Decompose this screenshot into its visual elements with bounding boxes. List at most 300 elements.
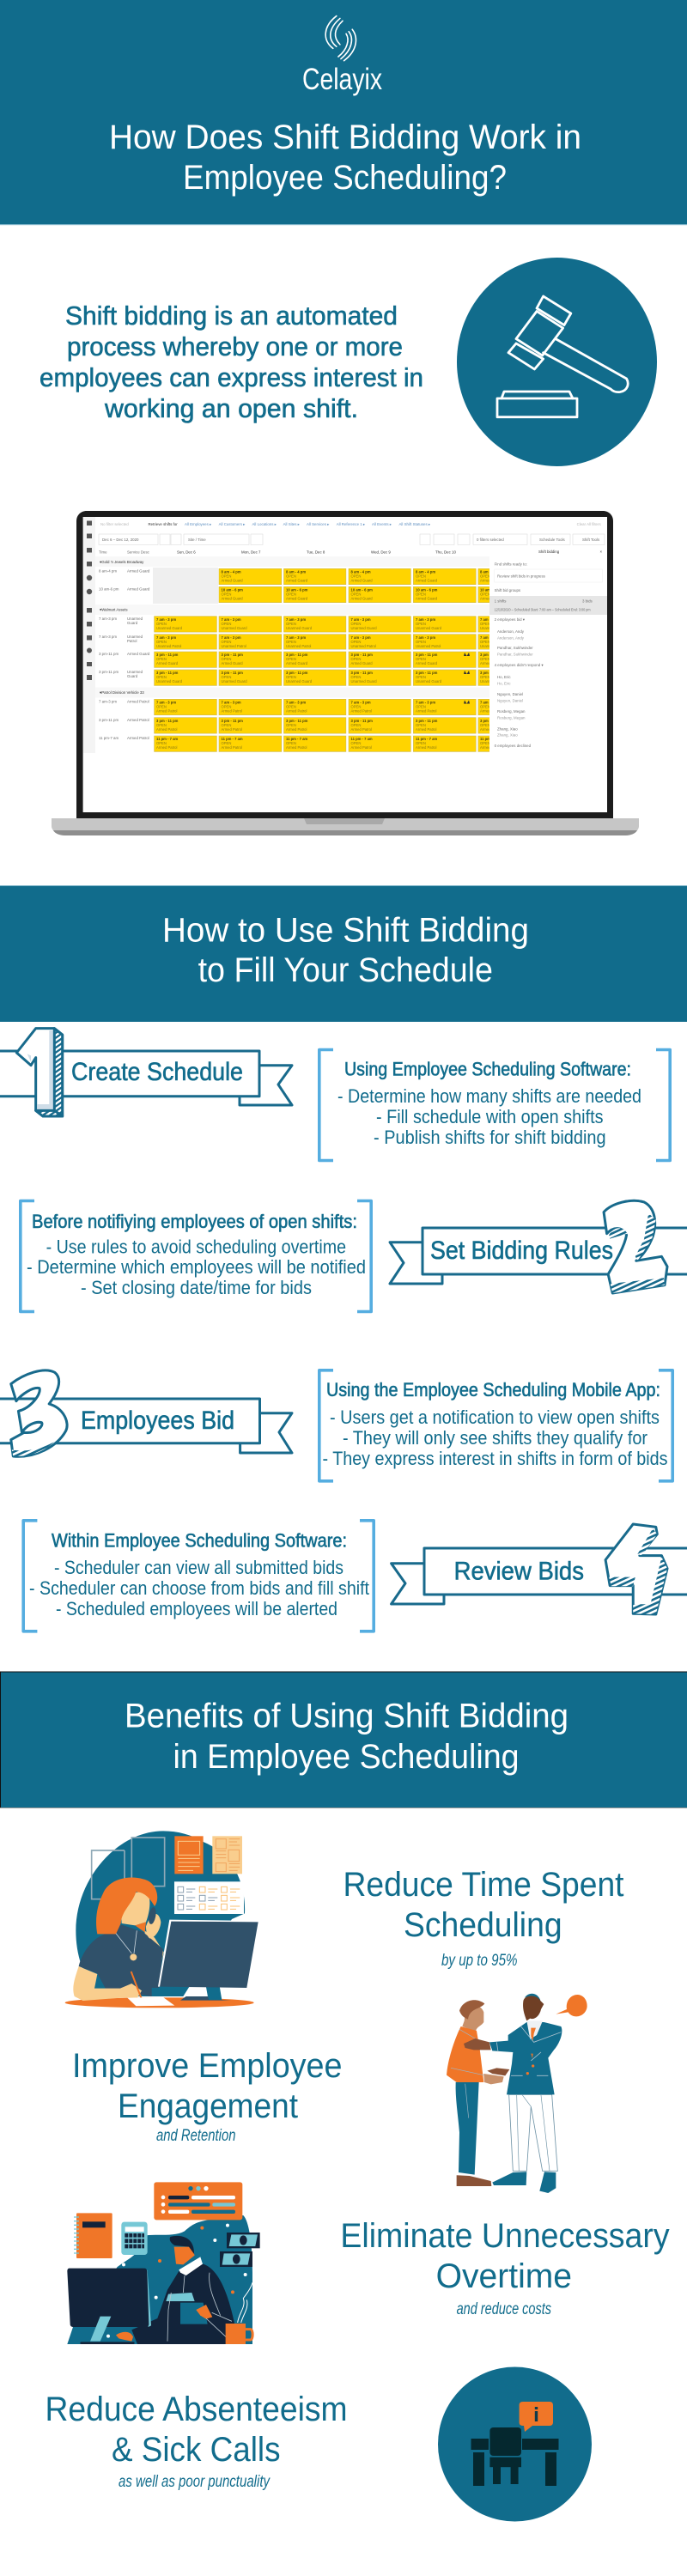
filter bar: No filter selected bbox=[100, 522, 129, 526]
schedule grid: open shifts: Armed bbox=[480, 727, 491, 732]
row labels: Armed Patrol bbox=[127, 736, 149, 740]
shift bidding side panel: Shift bidding bbox=[538, 550, 560, 554]
shift bidding side panel: Find shifts ready to: bbox=[495, 562, 527, 567]
benefits section header: Benefits of Using Shift Bidding bbox=[125, 1698, 568, 1735]
schedule grid: open shifts: OPEN bbox=[222, 704, 231, 709]
step 3: employees bid bbox=[0, 1370, 292, 1456]
schedule grid: open shifts: OPEN bbox=[286, 657, 296, 661]
schedule grid: open shifts: OPEN bbox=[480, 574, 490, 579]
heading: reduce absenteeism: Reduce Absenteeism bbox=[45, 2391, 347, 2428]
schedule grid: open shifts: 7 am - 3 pm bbox=[156, 701, 176, 704]
icon: sound waves bbox=[325, 16, 356, 61]
heading: improve employee engagement: Engagement bbox=[118, 2087, 298, 2125]
shift bidding side panel: Nguyen, Daniel bbox=[497, 692, 523, 696]
heading: improve employee engagement: and Retention bbox=[156, 2127, 235, 2145]
schedule grid: open shifts: Unarmed Guard bbox=[222, 679, 247, 683]
schedule grid: open shifts: 11 pm - 7 am bbox=[156, 737, 178, 741]
schedule grid: open shifts: OPEN bbox=[350, 741, 361, 745]
schedule grid: open shifts: OPEN bbox=[416, 574, 426, 579]
schedule grid: open shifts: Armed Patrol bbox=[286, 709, 307, 713]
schedule grid: open shifts: 8 am - 4 pm bbox=[350, 570, 371, 574]
schedule grid: open shifts: OPEN bbox=[350, 640, 361, 644]
schedule grid: open shifts: 3 pm bbox=[480, 671, 489, 675]
row labels: Patrol bbox=[127, 639, 137, 643]
schedule grid: open shifts: OPEN bbox=[156, 741, 167, 745]
schedule grid: open shifts: Armed Patrol bbox=[222, 727, 242, 732]
ribbon bbox=[0, 1051, 292, 1105]
callout: before notifying employees bbox=[21, 1200, 371, 1312]
intro text block: working an open shift. bbox=[104, 393, 358, 423]
row labels: Armed Patrol bbox=[127, 699, 149, 704]
schedule grid: open shifts: OPEN bbox=[222, 741, 231, 745]
schedule grid: open shifts: 3 pm - 11 pm bbox=[222, 653, 243, 657]
table head: Time bbox=[99, 550, 107, 555]
schedule grid: open shifts: 7 am - 3 pm bbox=[222, 635, 241, 640]
schedule grid: open shifts: Unarmed Patrol bbox=[156, 644, 181, 648]
dots bbox=[106, 2224, 247, 2338]
schedule grid: open shifts: Unarmed Guard bbox=[156, 626, 183, 630]
callout: using employee scheduling software: - Publish shifts for shift bidding bbox=[374, 1127, 606, 1148]
schedule grid: open shifts bbox=[155, 568, 495, 751]
filter bar: All Events ▸ bbox=[372, 522, 392, 526]
shift bidding side panel: 4 employees didn't respond ▾ bbox=[495, 663, 544, 667]
desk and chair bbox=[471, 2427, 558, 2486]
schedule grid: open shifts: OPEN bbox=[416, 723, 426, 727]
schedule grid: open shifts: Armed Patrol bbox=[416, 709, 437, 713]
schedule grid: open shifts: Unarmed Guard bbox=[286, 679, 313, 683]
schedule grid: open shifts: Unarmed Patrol bbox=[222, 644, 246, 648]
speech bubble bbox=[556, 1995, 587, 2016]
schedule grid: open shifts: OPEN bbox=[286, 723, 296, 727]
toolbar: Site / Time bbox=[188, 538, 206, 542]
wall frames bbox=[92, 1838, 165, 1899]
callout: using employee scheduling software: Using Employee Scheduling Software: bbox=[344, 1059, 631, 1080]
schedule grid: open shifts: OPEN bbox=[416, 675, 426, 679]
schedule grid: open shifts: Armed Patrol bbox=[350, 709, 372, 713]
monitor bbox=[158, 1920, 258, 2001]
schedule grid: open shifts: Armed bbox=[480, 579, 491, 582]
schedule grid: open shifts: 7 am - 3 pm bbox=[222, 617, 241, 622]
shift bidding side panel: Nguyen, Daniel bbox=[497, 699, 523, 702]
shift bidding side panel: Zhang, Xiao bbox=[497, 733, 518, 737]
schedule grid: open shifts: 3 pm - 11 pm bbox=[222, 671, 243, 675]
schedule grid: open shifts: 11 pm - 7 am bbox=[416, 737, 437, 741]
schedule grid: open shifts: 3 pm - 11 pm bbox=[350, 719, 373, 723]
callout: before notifying employees: - Determine which employees will be notified bbox=[27, 1256, 366, 1278]
heading: reduce absenteeism: & Sick Calls bbox=[112, 2431, 280, 2469]
laptop base bbox=[52, 818, 639, 835]
logo: Celayix: Celayix bbox=[302, 63, 382, 96]
how-to section header: to Fill Your Schedule bbox=[198, 951, 493, 989]
schedule grid: open shifts: 8 am - 4 pm bbox=[222, 570, 241, 574]
shift bidding side panel: 0 employees declined bbox=[495, 744, 532, 748]
intro text block bbox=[40, 301, 423, 423]
callout: within employee scheduling software: - Scheduler can view all submitted bids bbox=[54, 1557, 344, 1578]
schedule grid: open shifts: 8 am - 4 pm bbox=[286, 570, 306, 574]
illustration: two men shaking hands bbox=[447, 1994, 587, 2193]
schedule grid: open shifts: 7 am - 3 pm bbox=[286, 635, 306, 640]
schedule grid: open shifts: 8 am - 4 pm bbox=[416, 570, 435, 574]
schedule grid: open shifts: 7 am - 3 pm bbox=[350, 617, 371, 622]
callout: using employee scheduling software: - Determine how many shifts are needed bbox=[337, 1085, 641, 1107]
table head bbox=[99, 550, 456, 555]
report bubble bbox=[154, 2182, 242, 2220]
sidebar bbox=[83, 517, 95, 753]
number 3 bbox=[11, 1370, 67, 1456]
shift bidding side panel: Anderson, Andy bbox=[497, 635, 525, 641]
callout: using the mobile app: - They will only see shifts they qualify for bbox=[343, 1427, 647, 1449]
row labels: 8 am-4 pm bbox=[99, 568, 117, 574]
schedule grid: open shifts: Armed bbox=[480, 596, 491, 601]
schedule grid: open shifts: 3 pm - 11 pm bbox=[286, 653, 308, 657]
shift bidding side panel: Pandhar, Sukhwinder bbox=[497, 646, 533, 650]
heading: eliminate unnecessary overtime bbox=[340, 2217, 670, 2318]
schedule grid: open shifts: 3 pm - 11 pm bbox=[416, 719, 438, 723]
schedule grid: open shifts: OPEN bbox=[416, 741, 426, 745]
filter bar: All Locations ▸ bbox=[252, 522, 277, 526]
heading: reduce time spent scheduling: Reduce Time Spent bbox=[344, 1866, 623, 1904]
man in orange shirt bbox=[447, 2000, 491, 2186]
schedule grid: open shifts: 3 pm - 11 pm bbox=[156, 671, 179, 675]
money bbox=[220, 2233, 260, 2267]
schedule grid: open shifts: 7 am - 3 pm bbox=[350, 701, 371, 704]
schedule grid: open shifts: 3 pm bbox=[480, 653, 489, 657]
man in blue suit bbox=[489, 1994, 562, 2193]
toolbar: 0 filters selected bbox=[477, 538, 504, 542]
man bbox=[116, 2236, 234, 2344]
schedule grid: open shifts: OPEN bbox=[286, 640, 296, 644]
schedule grid: open shifts: OPEN bbox=[350, 622, 361, 626]
callout: before notifying employees: Before notifiying employees of open shifts: bbox=[32, 1211, 357, 1232]
calculator bbox=[121, 2222, 148, 2255]
schedule grid: open shifts: Armed Guard bbox=[416, 596, 438, 601]
schedule grid: open shifts: Armed Patrol bbox=[286, 727, 307, 732]
schedule grid: open shifts: Armed Guard bbox=[156, 661, 179, 665]
schedule grid: open shifts: Armed Guard bbox=[350, 596, 373, 601]
schedule grid: open shifts: Unarmed Patrol bbox=[350, 644, 376, 648]
ribbon bbox=[0, 1399, 292, 1453]
row labels bbox=[99, 568, 150, 740]
row labels: 7 am-3 pm bbox=[99, 699, 117, 704]
row labels: 3 pm-11 pm bbox=[99, 670, 119, 674]
schedule grid: open shifts: 7 am - 3 pm bbox=[350, 635, 371, 640]
logo: Celayix bbox=[302, 16, 382, 96]
shift bidding side panel: Ho, Eric bbox=[497, 682, 511, 685]
schedule grid: open shifts: Armed bbox=[480, 745, 491, 750]
site group rows bbox=[95, 556, 490, 697]
table head: Thu, Dec 10 bbox=[435, 550, 456, 555]
table head: Tue, Dec 8 bbox=[307, 550, 325, 555]
schedule grid: open shifts: Armed Guard bbox=[350, 661, 373, 665]
site group rows: ▾Gold 'n Jewels Broadway bbox=[100, 560, 144, 564]
coffee mug bbox=[226, 2282, 252, 2344]
schedule grid: open shifts: OPEN bbox=[480, 592, 490, 596]
schedule grid: open shifts: OPEN bbox=[350, 675, 361, 679]
how-to section header bbox=[0, 885, 687, 1022]
row labels: Unarmed bbox=[127, 670, 143, 674]
laptop bezel bbox=[76, 511, 613, 818]
heading: improve employee engagement: Improve Employee bbox=[72, 2047, 342, 2085]
schedule grid: open shifts: OPEN bbox=[416, 704, 426, 709]
toolbar: Schedule Tools bbox=[539, 538, 566, 542]
callout: using employee scheduling software: - Fill schedule with open shifts bbox=[376, 1106, 603, 1127]
schedule grid: open shifts: OPEN bbox=[416, 622, 426, 626]
schedule grid: open shifts: Armed Patrol bbox=[156, 745, 178, 750]
schedule grid: open shifts: 3 pm - 11 pm bbox=[416, 671, 438, 675]
row labels: Unarmed bbox=[127, 617, 143, 621]
schedule grid: open shifts: 3 pm - 11 pm bbox=[156, 653, 179, 657]
schedule grid: open shifts: OPEN bbox=[416, 640, 426, 644]
schedule grid: open shifts: Armed Guard bbox=[416, 661, 438, 665]
schedule grid: open shifts: Armed bbox=[480, 661, 491, 665]
schedule grid: open shifts: OPEN bbox=[350, 657, 361, 661]
schedule grid: open shifts: 7 am - 3 pm bbox=[156, 635, 176, 640]
icon: gavel in circle bbox=[457, 258, 657, 466]
schedule grid: open shifts: OPEN bbox=[480, 675, 490, 679]
row labels: Guard bbox=[127, 674, 138, 678]
schedule grid: open shifts: 7 am - 3 pm bbox=[286, 617, 306, 622]
title: How Does Shift Bidding Work in bbox=[109, 118, 581, 156]
row labels: 3 pm-11 pm bbox=[99, 652, 119, 656]
filter bar: All Shift Statuses ▸ bbox=[398, 522, 430, 526]
schedule grid: open shifts: Armed Patrol bbox=[156, 727, 178, 732]
schedule grid: open shifts: OPEN bbox=[416, 657, 426, 661]
toolbar: Dec 6 – Dec 12, 2020 bbox=[102, 538, 139, 542]
row labels: Unarmed bbox=[127, 635, 143, 639]
number 4 bbox=[605, 1524, 667, 1614]
schedule grid: open shifts: OPEN bbox=[156, 675, 167, 679]
row labels: Armed Guard bbox=[127, 568, 150, 574]
callout: before notifying employees: - Set closing date/time for bids bbox=[81, 1277, 312, 1298]
step 1: create schedule bbox=[0, 1029, 292, 1116]
benefits section header: in Employee Scheduling bbox=[173, 1738, 519, 1776]
site group rows: ▾Walmart Assets bbox=[100, 608, 128, 611]
schedule grid: open shifts: 7 am - 3 pm bbox=[156, 617, 176, 622]
schedule grid: open shifts: Unarmed Guard bbox=[416, 679, 442, 683]
schedule grid: open shifts: Armed Guard bbox=[286, 596, 308, 601]
number 2 bbox=[604, 1200, 667, 1293]
illustration: woman on the phone at computer bbox=[65, 1831, 258, 2008]
schedule grid: open shifts: 10 am bbox=[480, 587, 490, 592]
schedule grid: open shifts: OPEN bbox=[222, 640, 231, 644]
shift bidding side panel bbox=[489, 548, 607, 754]
callout: using the mobile app: - Users get a notification to view open shifts bbox=[330, 1406, 660, 1428]
laptop with scheduling software screenshot bbox=[52, 511, 639, 835]
schedule grid: open shifts: 7 am - 3 pm bbox=[416, 701, 435, 704]
schedule grid: open shifts: 7 am - 3 pm bbox=[416, 617, 435, 622]
schedule grid: open shifts: 10 am - 6 pm bbox=[222, 587, 243, 592]
filter bar: All Sites ▸ bbox=[283, 522, 300, 526]
filter bar: All Reference 1 ▸ bbox=[337, 522, 365, 526]
schedule grid: open shifts: OPEN bbox=[480, 640, 490, 644]
checklist bbox=[174, 1881, 244, 1914]
schedule grid: open shifts: OPEN bbox=[350, 704, 361, 709]
filter bar: Clear All filters bbox=[577, 522, 601, 526]
filter bar: All Customers ▸ bbox=[219, 522, 245, 526]
intro text block: process whereby one or more bbox=[67, 331, 403, 361]
schedule grid: open shifts: OPEN bbox=[156, 640, 167, 644]
schedule grid: open shifts: Unarm bbox=[480, 679, 491, 683]
step 4: review bids bbox=[392, 1524, 687, 1614]
heading: reduce absenteeism bbox=[45, 2391, 347, 2491]
desk bbox=[65, 1997, 254, 2008]
shift bidding side panel: 3 bids bbox=[582, 599, 593, 603]
shift bidding side panel: Shift bid groups bbox=[495, 588, 521, 592]
filter bar: Retrieve shifts for bbox=[148, 522, 178, 526]
toolbar: Shift Tools bbox=[582, 538, 600, 542]
ribbon bbox=[390, 1228, 687, 1284]
schedule grid: open shifts: OPEN bbox=[350, 723, 361, 727]
schedule grid: open shifts: Unarmed Guard bbox=[286, 626, 313, 630]
schedule grid: open shifts: OPEN bbox=[480, 723, 490, 727]
how-to section header: How to Use Shift Bidding bbox=[162, 912, 529, 950]
paper bbox=[127, 1997, 174, 2006]
schedule grid: open shifts: Armed Patrol bbox=[222, 709, 242, 713]
schedule grid: open shifts: Unarmed Guard bbox=[350, 626, 377, 630]
schedule grid: open shifts: Unarmed Patrol bbox=[286, 644, 311, 648]
schedule grid: open shifts: OPEN bbox=[480, 622, 490, 626]
callout: before notifying employees: - Use rules to avoid scheduling overtime bbox=[46, 1236, 346, 1257]
schedule grid: open shifts: 3 pm bbox=[480, 719, 489, 723]
callout: using the mobile app bbox=[319, 1370, 672, 1481]
schedule grid: open shifts: 3 pm - 11 pm bbox=[350, 671, 373, 675]
schedule grid: open shifts: 11 pm - 7 am bbox=[350, 737, 373, 741]
schedule grid: open shifts: Armed Guard bbox=[286, 579, 308, 582]
schedule grid: open shifts: 10 am - 6 pm bbox=[416, 587, 438, 592]
filter bar: All Employees ▸ bbox=[185, 522, 211, 526]
step 2: set bidding rules: Set Bidding Rules bbox=[430, 1236, 613, 1265]
schedule grid: open shifts: OPEN bbox=[286, 574, 296, 579]
callout: within employee scheduling software: - Scheduled employees will be alerted bbox=[56, 1598, 337, 1619]
ribbon bbox=[392, 1548, 687, 1604]
schedule grid: open shifts: OPEN bbox=[286, 592, 296, 596]
row labels: Armed Patrol bbox=[127, 718, 149, 722]
callout: using the mobile app: Using the Employee Scheduling Mobile App: bbox=[326, 1379, 660, 1400]
schedule grid: open shifts: 11 pm - 7 am bbox=[222, 737, 243, 741]
step 1: create schedule: Create Schedule bbox=[71, 1058, 243, 1086]
heading: reduce absenteeism: as well as poor punctuality bbox=[119, 2473, 271, 2491]
schedule grid: open shifts: 3 pm - 11 pm bbox=[416, 653, 438, 657]
peach poster bbox=[212, 1836, 242, 1874]
schedule grid: open shifts: 10 am - 6 pm bbox=[286, 587, 308, 592]
shift bidding side panel: 12/10/2020 – Scheduled Start: 7:00 am – Scheduled End: 3:00 pm bbox=[495, 608, 591, 611]
schedule grid: open shifts: Armed Patrol bbox=[156, 709, 178, 713]
schedule grid: open shifts: Unarmed Guard bbox=[156, 679, 183, 683]
row labels: 7 am-3 pm bbox=[99, 635, 117, 639]
icon: empty desk in circle bbox=[438, 2366, 592, 2521]
schedule grid: open shifts: Armed Guard bbox=[222, 596, 243, 601]
schedule grid: open shifts: Armed Patrol bbox=[416, 745, 437, 750]
schedule grid: open shifts: OPEN bbox=[286, 704, 296, 709]
schedule grid: open shifts: Armed Guard bbox=[222, 661, 243, 665]
schedule grid: open shifts: 7 am bbox=[480, 635, 489, 640]
row labels: Armed Guard bbox=[127, 652, 150, 656]
schedule grid: open shifts: OPEN bbox=[480, 704, 490, 709]
shift bidding side panel: Rosberg, Megan bbox=[497, 716, 526, 720]
screen bbox=[83, 517, 607, 812]
schedule grid: open shifts: 3 pm - 11 pm bbox=[350, 653, 373, 657]
filter bar bbox=[100, 522, 601, 526]
schedule grid: open shifts: OPEN bbox=[416, 592, 426, 596]
schedule grid: open shifts: 11 pm bbox=[480, 737, 490, 741]
woman bbox=[73, 1877, 164, 2001]
orange poster bbox=[174, 1836, 204, 1874]
schedule grid: open shifts: 7 am bbox=[480, 617, 489, 622]
schedule grid: open shifts: 7 am - 3 pm bbox=[416, 635, 435, 640]
shift bidding side panel: Pandhar, Sukhwinder bbox=[497, 653, 533, 656]
shift bidding side panel: Zhang, Xiao bbox=[497, 726, 518, 732]
schedule grid: open shifts: Armed Guard bbox=[416, 579, 438, 582]
schedule grid: open shifts: Unarm bbox=[480, 626, 491, 630]
step 4: review bids: Review Bids bbox=[454, 1557, 584, 1585]
step 3: employees bid: Employees Bid bbox=[81, 1406, 234, 1435]
title: Employee Scheduling? bbox=[183, 159, 507, 197]
schedule grid: open shifts: OPEN bbox=[286, 741, 296, 745]
heading: improve employee engagement bbox=[72, 2047, 342, 2145]
schedule grid: open shifts: Unarmed Guard bbox=[222, 626, 247, 630]
filter bar: All Services ▸ bbox=[307, 522, 329, 526]
schedule grid: open shifts: Armed Patrol bbox=[286, 745, 307, 750]
number 1 bbox=[16, 1029, 63, 1116]
schedule grid: open shifts: OPEN bbox=[286, 675, 296, 679]
callout: within employee scheduling software bbox=[23, 1521, 374, 1631]
intro text block: employees can express interest in bbox=[40, 362, 423, 392]
schedule grid: open shifts: 10 am - 6 pm bbox=[350, 587, 373, 592]
callout: within employee scheduling software: - Scheduler can choose from bids and fill shift bbox=[29, 1577, 369, 1599]
schedule grid: open shifts: OPEN bbox=[350, 574, 361, 579]
step 2: set bidding rules bbox=[390, 1200, 687, 1293]
shift bidding side panel: × bbox=[599, 550, 603, 554]
header panel bbox=[0, 0, 687, 225]
schedule grid: open shifts: 8 am bbox=[480, 570, 489, 574]
benefits section header bbox=[0, 1672, 687, 1808]
row labels: Armed Guard bbox=[127, 587, 150, 591]
heading: eliminate unnecessary overtime: Eliminate Unnecessary bbox=[340, 2217, 670, 2255]
schedule grid: open shifts: OPEN bbox=[480, 657, 490, 661]
site group rows: ▾Patrol Division Vehicle 33 bbox=[100, 690, 144, 695]
schedule grid: open shifts: 3 pm - 11 pm bbox=[286, 719, 308, 723]
schedule grid: open shifts: OPEN bbox=[350, 592, 361, 596]
schedule grid: open shifts: OPEN bbox=[156, 657, 167, 661]
schedule grid: open shifts: Unarmed Patrol bbox=[416, 644, 441, 648]
schedule grid: open shifts: OPEN bbox=[222, 723, 231, 727]
table head: Wed, Dec 9 bbox=[371, 550, 391, 555]
schedule grid: open shifts: Armed bbox=[480, 709, 491, 713]
shift bidding side panel: Review shift bids in progress bbox=[497, 574, 546, 579]
schedule grid: open shifts: OPEN bbox=[156, 704, 167, 709]
schedule grid: open shifts: Armed Patrol bbox=[222, 745, 242, 750]
shift bidding side panel: Rosberg, Megan bbox=[497, 709, 526, 714]
schedule grid: open shifts: Armed Patrol bbox=[350, 745, 372, 750]
schedule grid: open shifts: Armed Guard bbox=[222, 579, 243, 582]
callout: within employee scheduling software: Within Employee Scheduling Software: bbox=[52, 1530, 347, 1552]
schedule grid: open shifts: Unarmed Guard bbox=[416, 626, 442, 630]
schedule grid: open shifts: OPEN bbox=[156, 723, 167, 727]
schedule grid: open shifts: OPEN bbox=[222, 622, 231, 626]
heading: reduce time spent scheduling: by up to 95% bbox=[441, 1952, 518, 1970]
schedule grid: open shifts: 3 pm - 11 pm bbox=[286, 671, 308, 675]
callout: using employee scheduling software bbox=[319, 1049, 670, 1161]
table head: Sun, Dec 6 bbox=[177, 550, 196, 555]
teal backdrop bbox=[67, 2215, 252, 2344]
heading: reduce time spent scheduling bbox=[344, 1866, 623, 1970]
intro text block: Shift bidding is an automated bbox=[65, 301, 398, 331]
schedule grid: open shifts: Armed Patrol bbox=[416, 727, 437, 732]
schedule grid: open shifts: 7 am bbox=[480, 701, 489, 704]
shift bidding side panel: Ho, Eric bbox=[497, 675, 511, 679]
schedule grid: open shifts: Armed Guard bbox=[286, 661, 308, 665]
table head: Mon, Dec 7 bbox=[241, 550, 261, 555]
